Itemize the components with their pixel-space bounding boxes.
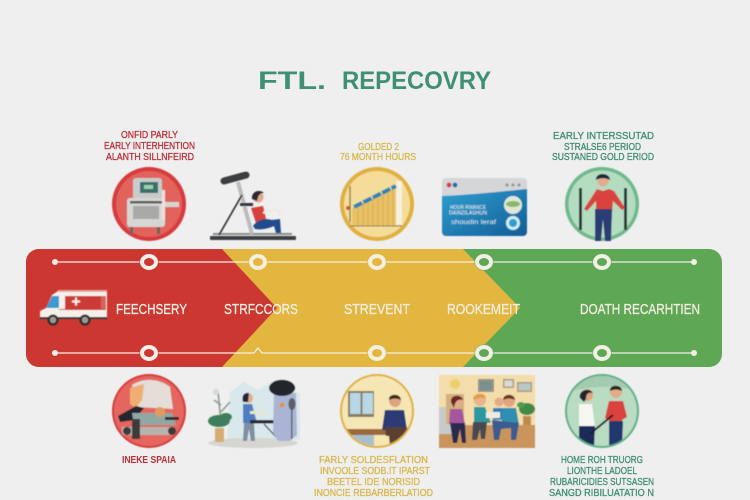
band labels: STREVENT [344, 301, 410, 318]
label: green top caption: SUSTANED GOLD ERIOD [552, 152, 654, 163]
icon: green circle with standing person [565, 167, 639, 241]
title: FTL. [258, 67, 326, 95]
label: yellow top caption: 76 MONTH HOURS [340, 152, 416, 163]
title: REPECOVRY [342, 67, 491, 95]
green stage [26, 249, 722, 367]
band labels: FEECHSERY [116, 301, 187, 318]
label: yellow bottom caption: BEETEL IDE NORISID [327, 476, 420, 488]
icon: red circle with patient on bed [112, 374, 186, 448]
label: yellow top caption: GOLDED 2 [358, 142, 399, 153]
red stage [26, 249, 277, 367]
icon: yellow circle with growth chart [340, 167, 414, 241]
band labels [116, 301, 700, 318]
label: yellow bottom caption: INONCIE REBARBERLATIOD [314, 487, 433, 499]
label: red top caption [104, 130, 195, 163]
label: green bottom caption: LIONTHE LADOEL [567, 465, 637, 477]
label: red bottom caption: INEKE SPAIA [122, 454, 176, 466]
band labels: ROOKEMEIT [447, 301, 520, 318]
label: yellow bottom caption: FARLY SOLDESFLATION [319, 454, 428, 466]
timeline band [26, 249, 722, 367]
icon: red circle with medical machine [112, 167, 186, 241]
label: green top caption [552, 131, 654, 163]
label: green top caption: EARLY INTERSSUTAD [553, 131, 654, 142]
band labels: STRFCCORS [224, 301, 298, 318]
label: yellow top caption [340, 142, 416, 163]
label: red top caption: ONFID PARLY [121, 130, 178, 141]
icon: green circle with two people and walking aid [565, 374, 640, 448]
top timeline track [52, 254, 697, 270]
label: green bottom caption: RUBARICIDIES SUTSASEN [550, 476, 654, 488]
label: red top caption: ALANTH SILLNFEIRD [106, 152, 194, 163]
icon: treadmill with seated person [210, 175, 296, 240]
label: green top caption: STRALSE6 PERIOD [564, 142, 641, 153]
bottom timeline track [52, 344, 697, 362]
label: green bottom caption [549, 454, 654, 499]
icon: blue hearing info card: shoudin leraf [451, 220, 496, 226]
label: red top caption: EARLY INTERHENTION [104, 141, 195, 152]
icon: yellow circle with seated man by window [340, 374, 414, 449]
icon: blue hearing info card: HOUR RWANCE [450, 205, 486, 211]
yellow stage [26, 249, 520, 367]
title [258, 67, 491, 95]
label: green bottom caption: HOME ROH TRUORG [561, 454, 643, 466]
icon: family sitting in a living room [439, 375, 535, 448]
icon: ambulance [40, 290, 107, 326]
icon: blue hearing info card: DAINZILASHUN [449, 210, 487, 216]
label: yellow bottom caption: INVOOLE SODB.IT IPARST [320, 465, 430, 477]
label: yellow bottom caption [314, 454, 433, 499]
icon: blue hearing info card [442, 178, 527, 236]
label: green bottom caption: SANGD RIBILUATATIO N [549, 487, 654, 499]
band labels: DOATH RECARHTIEN [580, 301, 700, 318]
icon: therapy room scene [208, 380, 300, 448]
